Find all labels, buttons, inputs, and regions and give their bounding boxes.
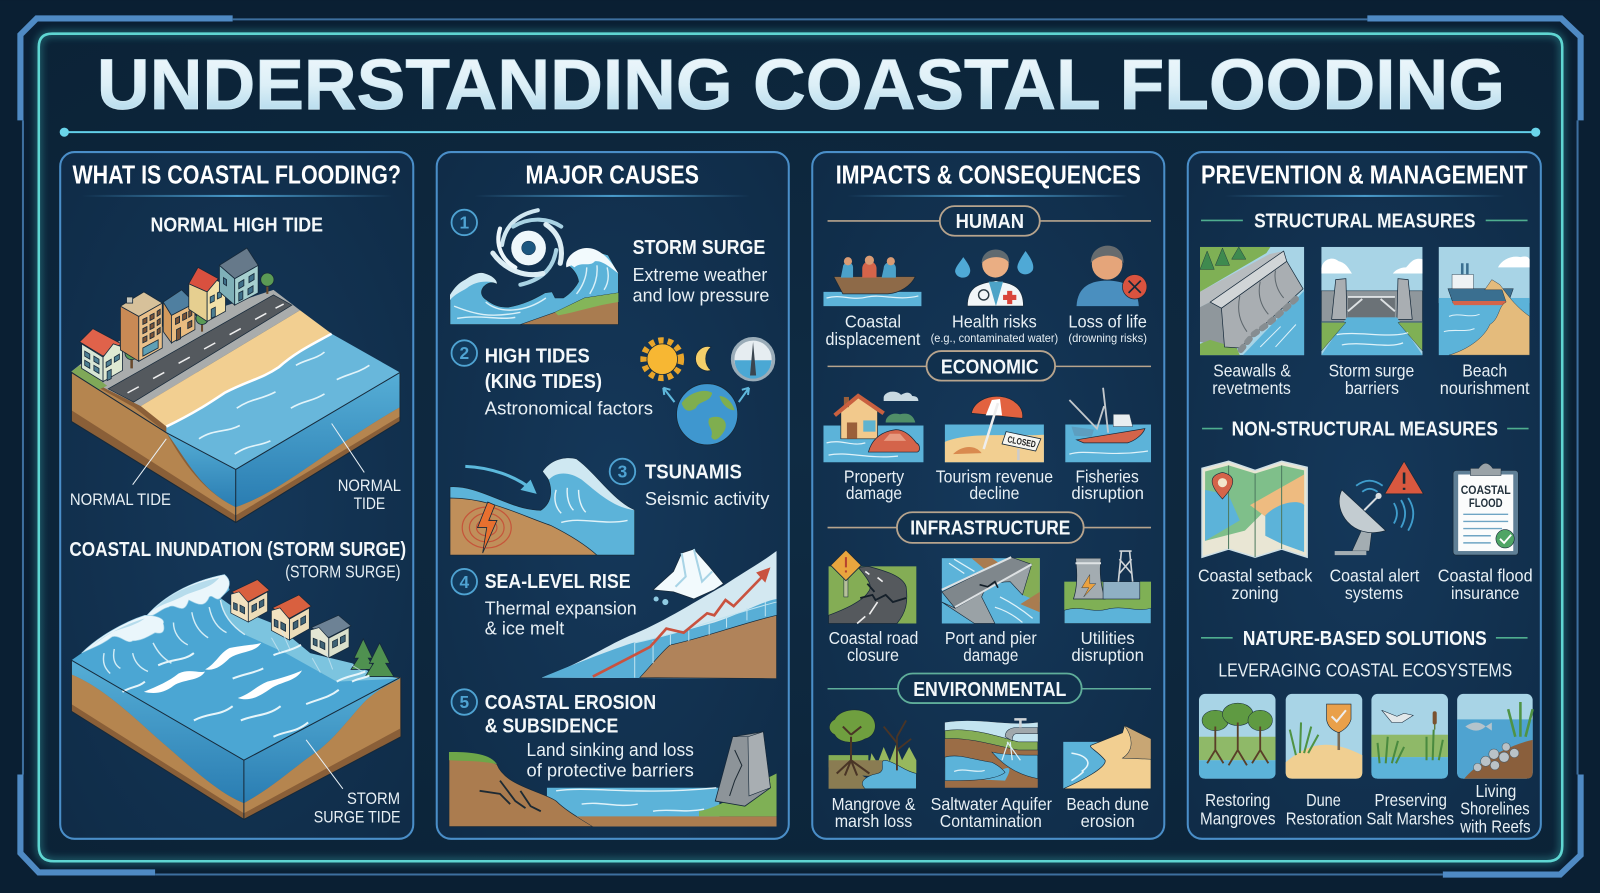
leader line: [306, 740, 343, 789]
icon: flood insurance clipboard: [1453, 463, 1518, 555]
number 4: [452, 569, 477, 594]
icon: property damage: [823, 392, 923, 462]
labels: infrastructure: closure: [847, 645, 899, 665]
title underline: [60, 128, 1540, 137]
text: sea-level rise: & ice melt: [485, 618, 564, 639]
number 5: [452, 689, 477, 715]
labels: economic: Property: [844, 467, 904, 487]
labels: nature-based: Shorelines: [1460, 798, 1530, 818]
icon: seawalls and revetments: [1200, 247, 1304, 355]
labels: non-structural: insurance: [1451, 583, 1519, 603]
labels: structural: Beach: [1462, 361, 1507, 381]
text: high tides: (KING TIDES): [485, 371, 602, 393]
panel: major causes: [437, 152, 789, 839]
text: tsunamis: [645, 462, 770, 509]
icon: tsunami wave: [450, 458, 635, 555]
labels: nature-based: Dune: [1306, 790, 1341, 810]
labels: human: (e.g., contaminated water): [931, 331, 1058, 345]
pill: infrastructure: [828, 512, 1151, 543]
labels: environmental: erosion: [1081, 811, 1135, 831]
subheading: nature-based solutions: NATURE-BASED SOLUTIONS: [1243, 628, 1487, 650]
text: high tides: [485, 345, 653, 418]
labels: structural: revetments: [1212, 378, 1291, 398]
labels: economic: Tourism revenue: [936, 467, 1053, 487]
labels: infrastructure: [829, 628, 1144, 665]
labels: nature-based: Salt Marshes: [1366, 809, 1454, 829]
number 2: [452, 340, 477, 366]
number 2: 2: [459, 343, 469, 363]
text: high tides: Astronomical factors: [485, 397, 653, 418]
water surface and surge waves: [71, 575, 400, 760]
labels: structural: [1212, 361, 1530, 398]
text: high tides: HIGH TIDES: [485, 345, 590, 367]
labels: human: (drowning risks): [1068, 331, 1147, 345]
label: storm surge tide: [314, 790, 401, 826]
label: storm surge tide: STORM: [347, 790, 400, 808]
leader lines: [133, 423, 364, 485]
labels: infrastructure: Utilities: [1081, 628, 1135, 648]
text: sea-level rise: [485, 571, 637, 639]
text: sea-level rise: SEA-LEVEL RISE: [485, 571, 631, 593]
pill: economic: [828, 351, 1151, 381]
labels: non-structural: systems: [1345, 583, 1403, 603]
labels: economic: [844, 467, 1144, 503]
text: coastal erosion: Land sinking and loss: [527, 739, 694, 760]
icon: storm surge barriers: [1321, 247, 1422, 355]
sublabel: storm surge: (STORM SURGE): [285, 562, 401, 582]
labels: infrastructure: damage: [963, 645, 1018, 665]
pill: infrastructure: INFRASTRUCTURE: [910, 518, 1070, 540]
text: coastal erosion: & SUBSIDENCE: [485, 716, 618, 738]
icon: utilities disruption: [1064, 551, 1151, 623]
labels: infrastructure: Coastal road: [829, 628, 918, 648]
text: coastal erosion: [485, 692, 694, 781]
icon: port and pier damage: [942, 557, 1040, 623]
subheading: coastal inundation: COASTAL INUNDATION (STORM SURGE): [69, 539, 406, 561]
icon: coastal erosion and cracked wall: [449, 732, 777, 827]
text: storm surge: [633, 237, 769, 306]
icon: living shorelines with reefs: [1457, 694, 1533, 779]
label: normal tide right: NORMAL: [338, 477, 401, 495]
foam ribbons: [144, 643, 302, 699]
labels: human: Loss of life: [1068, 312, 1147, 332]
labels: environmental: Mangrove &: [832, 794, 916, 814]
label: normal tide left: NORMAL TIDE: [70, 491, 171, 509]
diagram: storm surge block: [71, 575, 401, 819]
icon: tourism decline: [945, 396, 1044, 462]
icon: sea-level rise: [542, 549, 777, 679]
labels: nature-based: Preserving: [1374, 790, 1447, 810]
icon: boat: [823, 256, 921, 306]
heading: PREVENTION & MANAGEMENT: [1201, 162, 1528, 190]
labels: non-structural: zoning: [1232, 583, 1279, 603]
labels: structural: barriers: [1345, 378, 1399, 398]
labels: nature-based: Restoring: [1205, 790, 1270, 810]
text: storm surge: and low pressure: [633, 285, 769, 306]
labels: non-structural: [1198, 566, 1533, 603]
heading: MAJOR CAUSES: [526, 162, 699, 190]
panel: what is coastal flooding: [60, 152, 413, 839]
icon: coastal road closure: [829, 550, 916, 623]
icon: restoring mangroves: [1199, 694, 1276, 779]
labels: structural: Storm surge: [1329, 361, 1414, 381]
labels: environmental: [832, 794, 1149, 831]
number 3: 3: [618, 462, 628, 482]
text: coastal erosion: COASTAL EROSION: [485, 692, 656, 714]
labels: economic: Fisheries: [1076, 467, 1139, 487]
icon: flood insurance clipboard: COASTAL: [1461, 484, 1511, 497]
labels: human: [826, 312, 1147, 349]
labels: human: displacement: [826, 329, 921, 349]
number 4: 4: [459, 572, 469, 592]
text: storm surge: Extreme weather: [633, 264, 767, 285]
label: storm surge tide: SURGE TIDE: [314, 808, 401, 826]
icon: flood insurance clipboard: FLOOD: [1469, 497, 1503, 510]
label: normal tide right: [338, 477, 401, 513]
icon: dune restoration: [1286, 694, 1362, 779]
title: UNDERSTANDING COASTAL FLOODING: [97, 45, 1505, 125]
text: tsunamis: TSUNAMIS: [645, 462, 742, 484]
labels: non-structural: Coastal alert: [1330, 566, 1420, 586]
labels: nature-based: with Reefs: [1459, 817, 1531, 837]
number 5: 5: [459, 692, 469, 712]
flooded houses: [231, 580, 394, 677]
labels: nature-based: Restoration: [1286, 809, 1362, 829]
panel: impacts and consequences: [812, 152, 1164, 839]
labels: economic: disruption: [1071, 483, 1144, 503]
labels: nature-based: [1200, 781, 1531, 837]
labels: nature-based: Living: [1476, 781, 1516, 801]
labels: nature-based: Mangroves: [1200, 809, 1276, 829]
pill: economic: ECONOMIC: [941, 356, 1039, 378]
icon: person with cross: [1077, 246, 1147, 306]
labels: economic: decline: [969, 483, 1019, 503]
labels: non-structural: Coastal flood: [1438, 566, 1533, 586]
labels: infrastructure: disruption: [1071, 645, 1144, 665]
icon: fisheries disruption: [1065, 388, 1151, 462]
icon: sun, moon, gauge and earth: [644, 339, 773, 445]
icon: doctor: [955, 250, 1033, 306]
text: sea-level rise: Thermal expansion: [485, 597, 637, 618]
labels: infrastructure: Port and pier: [945, 628, 1037, 648]
labels: environmental: Saltwater Aquifer: [931, 794, 1052, 814]
icon: preserving salt marshes: [1371, 694, 1448, 779]
labels: economic: damage: [846, 483, 902, 503]
icon: saltwater aquifer contamination: [945, 719, 1038, 788]
panel: prevention and management: [1188, 152, 1541, 839]
subheading: leveraging coastal ecosystems: LEVERAGING COASTAL ECOSYSTEMS: [1218, 660, 1512, 681]
diagram: normal high tide block: [71, 248, 400, 522]
icon: setback zoning map: [1202, 461, 1307, 557]
text: coastal erosion: of protective barriers: [527, 760, 694, 781]
labels: structural: Seawalls &: [1213, 361, 1291, 381]
label: normal tide right: TIDE: [354, 495, 385, 513]
subheading: normal high tide: NORMAL HIGH TIDE: [151, 215, 323, 237]
labels: human: Health risks: [952, 312, 1037, 332]
pill: environmental: [828, 673, 1151, 703]
subheading: non-structural measures: NON-STRUCTURAL MEASURES: [1232, 419, 1498, 441]
labels: environmental: Contamination: [940, 811, 1042, 831]
pill: human: HUMAN: [956, 211, 1024, 233]
number 3: [610, 459, 635, 484]
heading: IMPACTS & CONSEQUENCES: [836, 162, 1141, 190]
buildings row: [80, 248, 274, 382]
text: tsunamis: Seismic activity: [645, 488, 770, 509]
labels: environmental: marsh loss: [835, 811, 913, 831]
icon: coastal alert dish: [1335, 461, 1423, 555]
labels: environmental: Beach dune: [1066, 794, 1149, 814]
number 1: [452, 210, 477, 235]
number 1: 1: [459, 213, 469, 233]
labels: human: Coastal: [845, 312, 901, 332]
text: storm surge: STORM SURGE: [633, 237, 765, 259]
subheading: structural measures: STRUCTURAL MEASURES: [1254, 211, 1476, 233]
labels: non-structural: Coastal setback: [1198, 566, 1313, 586]
pill: environmental: ENVIRONMENTAL: [913, 679, 1066, 701]
icon: storm surge wave and hurricane: [450, 210, 618, 325]
pill: human: [828, 206, 1151, 236]
labels: structural: nourishment: [1440, 378, 1530, 398]
icon: beach nourishment: [1439, 247, 1530, 355]
icon: mangrove and marsh loss: [829, 710, 916, 789]
heading: WHAT IS COASTAL FLOODING?: [72, 162, 401, 190]
icon: tourism decline: CLOSED: [1007, 434, 1037, 450]
icon: beach dune erosion: [1063, 726, 1151, 789]
